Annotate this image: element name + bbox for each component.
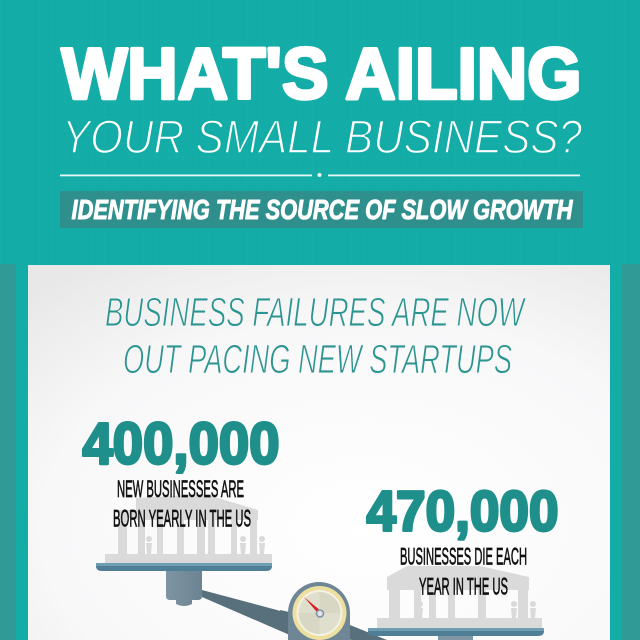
illustration: left building (105, 494, 272, 563)
stat caption: new businesses (113, 476, 251, 532)
illustration: right scale plate (368, 628, 544, 640)
side strip: left (0, 264, 16, 640)
illustration: right building (377, 566, 542, 628)
stat: 400,000: 400,000 (82, 412, 280, 476)
divider (60, 173, 580, 177)
panel: business failures (28, 265, 610, 640)
stat caption: businesses die: YEAR IN THE US (419, 574, 508, 600)
stat: 400,000: BORN YEARLY IN THE US (113, 506, 251, 532)
stat caption: businesses die (400, 544, 527, 600)
illustration: gauge (288, 582, 350, 640)
stat: 470,000 (366, 480, 558, 600)
illustration: balance arm (202, 590, 387, 640)
subtitle: YOUR SMALL BUSINESS? (62, 110, 582, 163)
stat: 400,000: NEW BUSINESSES ARE (117, 476, 244, 503)
side strip: right (622, 264, 640, 640)
illustration: left scale plate (96, 563, 272, 571)
stat: 470,000: 470,000 (366, 480, 558, 544)
panel heading (105, 289, 526, 382)
title: WHAT'S AILING (62, 34, 582, 114)
illustration: left bracket (166, 571, 202, 606)
stat: 400,000 (82, 412, 280, 532)
